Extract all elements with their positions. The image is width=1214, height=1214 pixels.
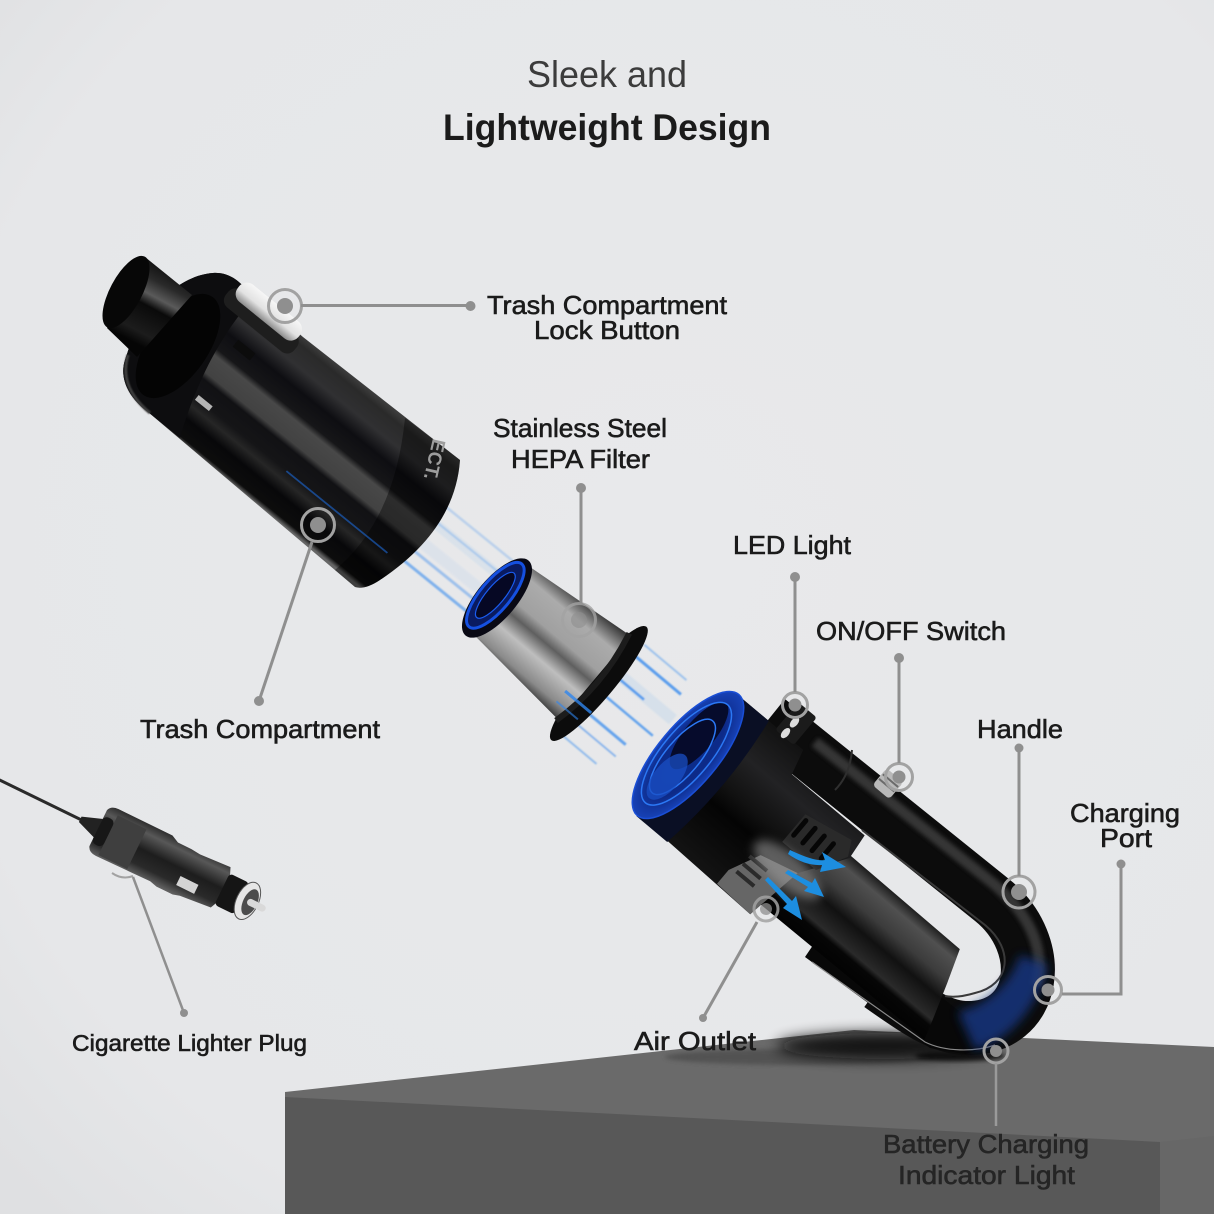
collar [119,280,237,412]
cigarette lighter plug [0,753,277,934]
led bracket [774,702,817,747]
lock button [220,275,310,357]
disc hub [639,747,695,807]
main unit [612,675,1018,1052]
pedestal block [285,1030,1214,1214]
metal tip [229,878,266,924]
callout: charging port: Port [1100,823,1153,853]
callout: cigarette lighter plug [72,873,307,1056]
callout: battery charging indicator light: Battery Charging [883,1129,1089,1159]
airflow beams: compartment to filter [369,479,514,616]
trash compartment [93,249,465,588]
blue glow on flange [564,690,592,714]
title: Sleek and [527,54,687,95]
upper vent panel [782,807,858,880]
disc hole [661,694,738,777]
callout: air outlet [634,897,778,1056]
callout: trash compartment lock button: Lock Button [534,315,680,345]
callout: on/off switch: ON/OFF Switch [816,616,1006,646]
ring blue [457,554,533,636]
side contact [176,876,198,894]
callout: charging port: Charging [1070,798,1180,828]
handle inner edge [862,830,1005,997]
motor tube [744,817,985,1041]
callout: led light [733,530,852,718]
handle highlight [815,742,1039,985]
callout: battery charging indicator light [883,1039,1089,1190]
callout: trash compartment lock button: Trash Compartment [487,290,728,320]
title [443,54,771,148]
flange [540,617,658,750]
cone inner rim [556,633,635,725]
callout: led light: LED Light [733,530,852,560]
shoulder dome [123,273,255,438]
callout: on/off switch [816,616,1006,790]
compartment end tint [335,418,460,588]
blue intake disc [614,675,762,835]
airflow arrows [765,850,846,920]
compartment details [162,275,465,555]
blue arc glow [958,955,1048,1050]
ring inner [470,567,521,623]
callout: handle [977,714,1063,908]
tip knurl [214,873,249,914]
cone [467,558,631,721]
plug side panel [98,815,147,869]
center pin [246,898,267,913]
callout: trash compartment [140,508,381,744]
nozzle mouth [93,249,159,335]
handle loop [768,720,1028,1028]
compartment body [123,273,460,588]
title: Lightweight Design [443,107,771,148]
lower trim line [812,962,995,1050]
cable [0,766,108,841]
brand lettering: ECT. [419,437,449,482]
small ring [450,548,544,648]
callout: trash compartment: Trash Compartment [140,714,381,744]
callout: battery charging indicator light: Indicator Light [898,1160,1076,1190]
latch details [233,340,255,361]
neck [637,695,773,846]
lower vent section [716,838,798,921]
airflow beams: filter to main unit [531,615,699,784]
callout: hepa filter [493,413,667,636]
callout: air outlet: Air Outlet [634,1026,757,1056]
callout: hepa filter: HEPA Filter [511,444,650,474]
dome rim highlight [126,355,150,413]
air haze [745,831,830,909]
on/off switch [872,768,903,799]
handle seam [835,750,852,790]
main body [639,698,884,940]
callout: trash compartment lock button [268,290,728,345]
upper vent slots [790,817,837,862]
handle base lower [805,920,1000,1054]
nozzle tube [107,257,192,357]
callout: charging port [1034,798,1180,1004]
plug barrel [86,805,237,915]
disc rings [627,689,746,818]
callout: cigarette lighter plug: Cigarette Lighter Plug [72,1030,307,1056]
callout: hepa filter: Stainless Steel [493,413,667,443]
blue streak [286,470,388,554]
callout: handle: Handle [977,714,1063,744]
hepa filter [434,528,658,750]
